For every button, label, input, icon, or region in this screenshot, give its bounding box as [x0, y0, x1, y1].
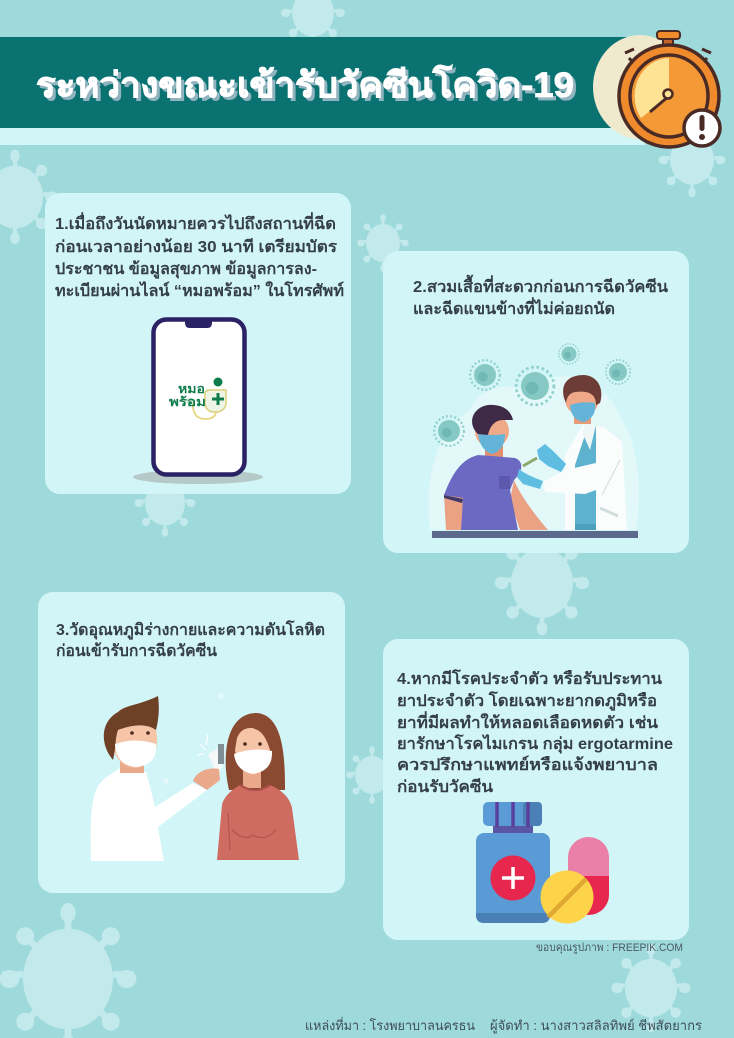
step 1 text: 1.เมื่อถึงวันนัดหมายควรไปถึงสถานที่ฉีด [55, 212, 336, 233]
step 1 text: ก่อนเวลาอย่างน้อย 30 นาที เตรียมบัตร [55, 237, 337, 256]
panel: step 3 [38, 592, 345, 893]
step 4 text: ยาประจำตัว โดยเฉพาะยากดภูมิหรือ [397, 690, 657, 712]
step 1 text: ประชาชน ข้อมูลสุขภาพ ข้อมูลการลง- [55, 260, 317, 280]
step 4 text: ควรปรึกษาแพทย์หรือแจ้งพยาบาล [397, 755, 658, 774]
step 2 text [413, 274, 668, 318]
doctor [537, 375, 627, 530]
step 1 text: ทะเบียนผ่านไลน์ “หมอพร้อม” ในโทรศัพท์ [55, 280, 344, 300]
step 3 text [56, 619, 325, 660]
thermometer [193, 734, 224, 790]
illustration: temperature check [91, 693, 299, 861]
step 4 text: 4.หากมีโรคประจำตัว หรือรับประทาน [397, 668, 662, 688]
icon: phone with app logo: หมอ [178, 382, 205, 396]
step 4 text: ยาที่มีผลทำให้หลอดเลือดหดตัว เช่น [397, 711, 658, 732]
title banner [0, 37, 645, 145]
step 2 text: 2.สวมเสื้อที่สะดวกก่อนการฉีดวัคซีน [413, 274, 668, 296]
illustration: doctor vaccinating patient [429, 344, 639, 538]
footer author: ผู้จัดทำ : นางสาวสลิลทิพย์ ชีพสัตยากร [490, 1018, 702, 1034]
health worker [91, 696, 207, 861]
panel: step 2 [383, 251, 689, 553]
illustration: medicine bottle and pills [476, 802, 609, 924]
step 4 text: ก่อนรับวัคซีน [397, 777, 493, 796]
icon: phone with app logo: พร้อม [169, 395, 206, 409]
patient [444, 405, 548, 530]
step 4 text [397, 668, 673, 796]
icon: stopwatch with alert [593, 31, 720, 147]
panel: step 1 [45, 193, 351, 494]
title: ระหว่างขณะเข้ารับวัคซีนโควิด-19 [36, 64, 574, 105]
icon: phone with app logo [133, 319, 263, 484]
panel: step 4 [383, 639, 689, 940]
step 4 text: ยารักษาโรคไมเกรน กลุ่ม ergotarmine [397, 733, 673, 754]
woman [217, 713, 299, 860]
image credit: ขอบคุณรูปภาพ : FREEPIK.COM [536, 942, 683, 954]
footer source: แหล่งที่มา : โรงพยาบาลนครธน [305, 1017, 475, 1033]
step 3 text: ก่อนเข้ารับการฉีดวัคซีน [56, 641, 217, 660]
step 1 text [55, 212, 344, 300]
step 2 text: และฉีดแขนข้างที่ไม่ค่อยถนัด [413, 297, 615, 318]
step 3 text: 3.วัดอุณหภูมิร่างกายและความดันโลหิต [56, 619, 325, 641]
